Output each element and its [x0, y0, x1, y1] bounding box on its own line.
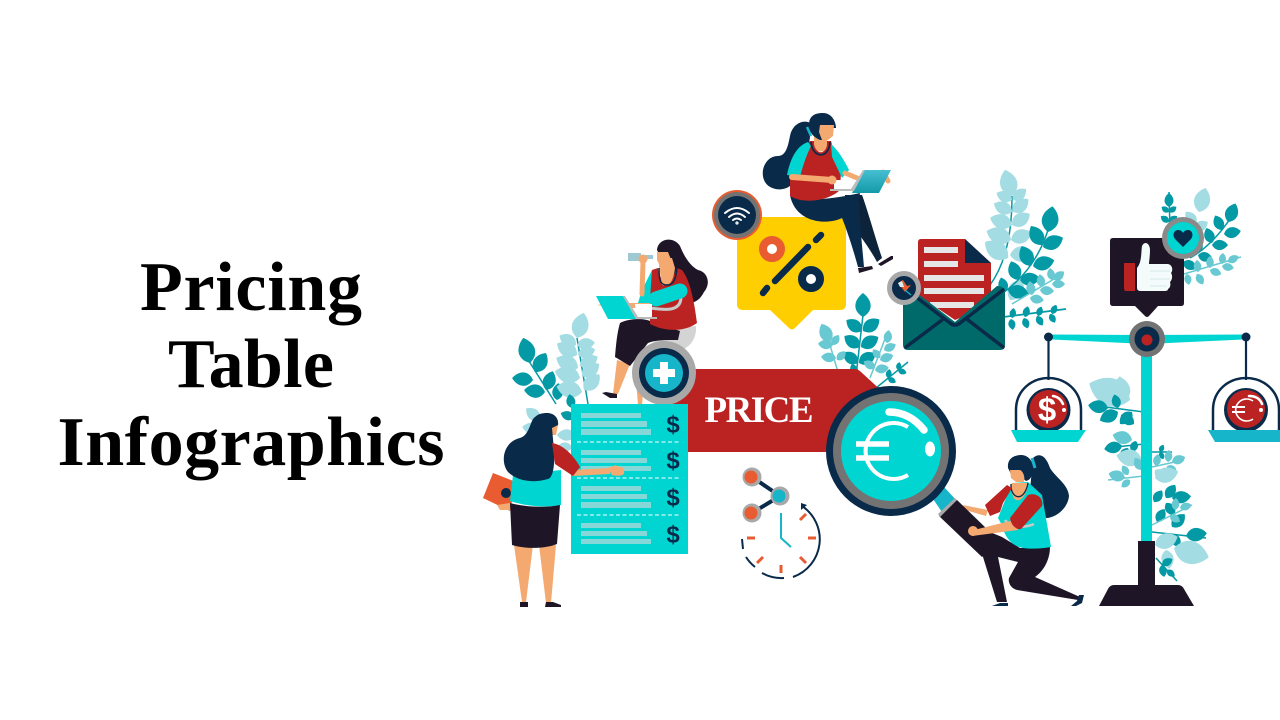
envelope creases — [906, 290, 1003, 347]
shoes — [520, 602, 561, 607]
clock hands — [781, 513, 791, 547]
plant: envelope light — [980, 168, 1035, 304]
shirt — [790, 141, 841, 201]
clock arrowhead — [801, 503, 807, 510]
face — [819, 125, 834, 140]
right sleeve — [1010, 494, 1042, 529]
woman presenting list — [483, 413, 624, 607]
shirt — [650, 268, 697, 330]
skirt — [615, 319, 680, 366]
plant: left light — [553, 311, 605, 404]
neckline — [1011, 483, 1028, 497]
plant: behind price banner, small dark — [876, 362, 908, 388]
paper — [834, 180, 858, 190]
like speech bubble — [1110, 238, 1184, 317]
plant: lower cluster behind woman — [521, 393, 576, 452]
back hand — [497, 503, 510, 510]
handle — [939, 500, 990, 557]
clock ticks — [747, 514, 816, 573]
plus sign — [653, 362, 675, 384]
small dark sprig — [1150, 444, 1208, 549]
strap — [1005, 520, 1034, 527]
legs — [983, 530, 1080, 602]
beam — [1052, 334, 1243, 344]
percent sign — [763, 235, 821, 293]
folder clasp — [501, 488, 511, 498]
pole — [1141, 355, 1152, 545]
tag: percent discount — [737, 217, 846, 330]
forearm — [970, 520, 1018, 536]
medium sprig — [1152, 450, 1193, 525]
wifi icon — [725, 208, 749, 224]
dollar signs: $ — [666, 522, 680, 548]
plant: left dark teal — [511, 336, 564, 404]
document lines — [924, 247, 984, 308]
laptop — [596, 296, 636, 319]
hair — [763, 122, 812, 189]
forearm — [597, 303, 650, 308]
left sleeve — [985, 485, 1012, 516]
badge: pin — [887, 271, 921, 305]
plant: envelope small dark — [1003, 304, 1066, 330]
back leg — [636, 380, 644, 405]
shoes — [992, 595, 1084, 606]
upper arm — [963, 505, 988, 516]
strings — [1048, 337, 1246, 380]
hair — [504, 413, 558, 481]
base — [1099, 541, 1194, 606]
hand — [638, 254, 648, 264]
thumbs-up icon — [1124, 243, 1172, 291]
list card: pricing table — [571, 404, 688, 554]
dollar signs: $ — [666, 484, 680, 512]
far arm — [845, 172, 888, 181]
title — [58, 249, 444, 481]
title: Table — [168, 326, 334, 403]
face — [1010, 470, 1024, 482]
neck and face — [545, 425, 558, 445]
woman with telescope — [596, 240, 708, 405]
neck — [1012, 483, 1028, 500]
laptop base — [830, 170, 865, 191]
hand — [608, 465, 624, 476]
plant: scale pole right side — [1150, 444, 1212, 581]
raised arm — [642, 262, 643, 294]
neck — [659, 258, 675, 286]
handle neck — [931, 487, 958, 515]
plant: scale pole left side — [1084, 371, 1146, 490]
plant: behind price banner, medium right — [862, 330, 898, 378]
dark leaves — [1087, 393, 1144, 462]
plant: thumb light — [1182, 186, 1213, 234]
laptop base — [623, 296, 657, 319]
paper — [635, 304, 652, 317]
folded corner — [965, 239, 991, 263]
hair tie — [1032, 458, 1035, 468]
hair tie — [807, 127, 811, 136]
glass highlight — [889, 412, 924, 430]
icon: share nodes — [742, 468, 790, 522]
arm — [572, 471, 610, 473]
euro symbol — [856, 423, 908, 479]
envelope front — [903, 286, 1005, 350]
pivot — [1129, 321, 1165, 357]
woman's front arm — [968, 494, 1042, 536]
light sprig — [1152, 464, 1212, 570]
back leg — [845, 195, 882, 262]
handle collar — [938, 498, 957, 517]
shoe — [602, 392, 617, 398]
badge: wifi — [712, 190, 762, 240]
rim — [826, 386, 956, 516]
hair — [657, 240, 708, 303]
telescope — [628, 253, 653, 261]
woman with laptop on tag — [763, 113, 893, 273]
title: Pricing — [140, 249, 362, 326]
plant: thumb medium — [1184, 253, 1241, 286]
dollar signs: $ — [666, 448, 680, 474]
head — [809, 113, 836, 140]
balance scale — [1011, 321, 1280, 606]
icon: clock — [742, 503, 820, 578]
folder — [483, 473, 516, 511]
shin — [613, 360, 630, 394]
skirt — [510, 503, 560, 548]
right pan with euro coin — [1208, 378, 1280, 442]
strap — [650, 298, 681, 309]
sleeve — [656, 291, 680, 299]
seat — [650, 326, 696, 350]
pin icon — [898, 280, 911, 295]
woman holding magnifier — [963, 455, 1084, 606]
title: Infographics — [58, 404, 444, 481]
heart icon — [1174, 230, 1192, 247]
plant: thumb small dark — [1159, 192, 1179, 232]
lower dark sprig — [1156, 556, 1177, 581]
dollar signs — [666, 412, 680, 548]
sleeve — [552, 443, 580, 476]
left pan with dollar coin: $ — [1038, 391, 1056, 428]
face — [657, 252, 672, 266]
price banner — [670, 369, 885, 452]
document — [918, 239, 991, 320]
front leg — [790, 193, 864, 267]
shirt — [510, 470, 561, 506]
left pan with dollar coin — [1011, 378, 1086, 442]
plant: behind price banner, medium left — [816, 321, 848, 372]
head — [1008, 455, 1033, 481]
neck — [814, 136, 827, 152]
plant: behind price banner, dark — [840, 293, 883, 376]
envelope with document — [903, 239, 1005, 350]
plant: thumb dark — [1181, 201, 1242, 273]
shoes — [858, 256, 893, 273]
sleeves — [787, 142, 849, 178]
laptop — [852, 170, 891, 193]
row bars — [581, 413, 651, 544]
neckline — [659, 268, 677, 285]
back sleeve — [638, 270, 656, 305]
hand — [968, 526, 978, 536]
arm — [792, 177, 832, 180]
hand — [828, 176, 836, 184]
neckline — [811, 142, 830, 155]
dollar signs: $ — [666, 412, 680, 438]
ponytail — [1030, 455, 1069, 518]
button: plus — [632, 341, 696, 405]
magnifying glass — [826, 386, 990, 557]
plant: envelope dark — [996, 205, 1066, 300]
light leaves — [1084, 371, 1135, 413]
price label: PRICE — [704, 390, 814, 431]
plant: envelope medium — [1012, 268, 1067, 305]
medium leaves — [1107, 429, 1146, 490]
badge: heart — [1162, 217, 1204, 259]
legs — [514, 545, 556, 603]
shirt — [998, 482, 1051, 549]
